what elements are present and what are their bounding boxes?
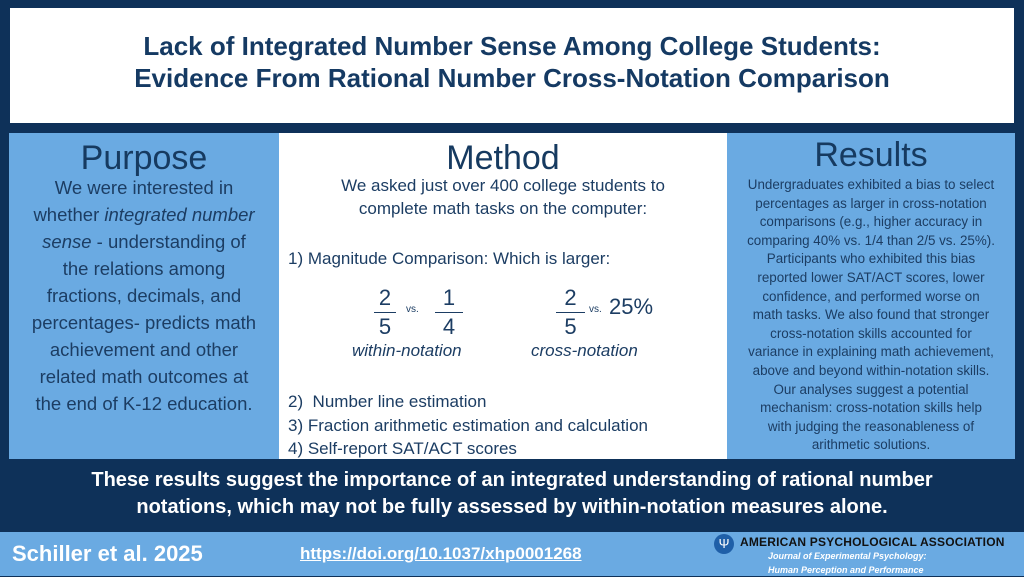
results text: arithmetic solutions.	[812, 437, 930, 452]
journal info: Journal of Experimental Psychology:	[768, 551, 927, 561]
results text: variance in explaining math achievement,	[748, 344, 994, 359]
tasks 2-4: 2) Number line estimation	[288, 392, 486, 411]
results text: comparing 40% vs. 1/4 than 2/5 vs. 25%).	[747, 233, 995, 248]
method intro: We asked just over 400 college students to	[341, 176, 665, 195]
heading: purpose: Purpose	[81, 139, 207, 177]
tasks 2-4: 3) Fraction arithmetic estimation and calculation	[288, 416, 648, 434]
purpose text: the relations among	[63, 258, 225, 279]
purpose text: fractions, decimals, and	[47, 285, 241, 306]
method intro: complete math tasks on the computer:	[359, 199, 647, 218]
panel: method	[279, 133, 727, 459]
fraction comparison examples: 2 5	[379, 285, 391, 339]
purpose text	[32, 177, 256, 414]
conclusion	[91, 469, 933, 518]
results text: reported lower SAT/ACT scores, lower	[757, 270, 985, 285]
fraction comparison examples: 2 5	[564, 285, 577, 339]
title: Lack of Integrated Number Sense Among College Students:	[143, 31, 881, 61]
conclusion: These results suggest the importance of an integrated understanding of rational number	[91, 469, 933, 491]
conclusion: notations, which may not be fully assessed by within-notation measures alone.	[136, 496, 888, 518]
fraction comparison examples: 1 4	[443, 285, 455, 339]
heading: results: Results	[814, 136, 928, 174]
purpose text: whether integrated number	[33, 204, 255, 225]
results text: comparisons (e.g., higher accuracy in	[760, 214, 982, 229]
results text: mechanism: cross-notation skills help	[760, 400, 982, 415]
footer	[0, 532, 1024, 576]
journal info: Human Perception and Performance	[768, 565, 924, 575]
doi link: https://doi.org/10.1037/xhp0001268	[300, 544, 582, 563]
heading: method: Method	[446, 139, 560, 177]
results text: with judging the reasonableness of	[768, 419, 974, 434]
method intro	[341, 176, 665, 218]
results text: percentages as larger in cross-notation	[755, 196, 987, 211]
purpose text: percentages- predicts math	[32, 312, 256, 333]
purpose text: We were interested in	[55, 177, 233, 198]
title: Evidence From Rational Number Cross-Notation Comparison	[134, 63, 890, 93]
purpose text: sense - understanding of	[42, 231, 246, 252]
fraction comparison examples	[374, 285, 653, 339]
journal info	[740, 535, 1005, 575]
results text	[747, 177, 995, 452]
results text: confidence, and performed worse on	[762, 289, 980, 304]
results text: Undergraduates exhibited a bias to select	[748, 177, 994, 192]
purpose text: achievement and other	[50, 339, 238, 360]
results text: above and beyond within-notation skills.	[753, 363, 989, 378]
fraction comparison examples: vs.	[406, 304, 419, 315]
task 1: 1) Magnitude Comparison: Which is larger:	[288, 249, 610, 268]
citation: Schiller et al. 2025	[12, 541, 203, 566]
fraction comparison examples: 25%	[609, 294, 653, 319]
purpose text: the end of K-12 education.	[35, 393, 253, 414]
panel: purpose	[9, 133, 279, 459]
panel: results	[727, 133, 1015, 459]
journal info: AMERICAN PSYCHOLOGICAL ASSOCIATION	[740, 535, 1005, 549]
title	[10, 8, 1014, 123]
results text: math tasks. We also found that stronger	[753, 307, 989, 322]
results text: cross-notation skills accounted for	[770, 326, 972, 341]
fraction comparison examples: vs.	[589, 304, 602, 315]
icon: APA logo: Ψ	[719, 536, 729, 551]
tasks 2-4: 4) Self-report SAT/ACT scores	[288, 439, 517, 458]
icon: APA logo	[714, 534, 734, 554]
results text: Participants who exhibited this bias	[767, 251, 975, 266]
notation labels: within-notation	[352, 341, 462, 360]
panel: method: cross-notation	[531, 341, 638, 360]
purpose text: related math outcomes at	[40, 366, 248, 387]
results text: Our analyses suggest a potential	[773, 382, 969, 397]
tasks 2-4	[288, 392, 648, 458]
